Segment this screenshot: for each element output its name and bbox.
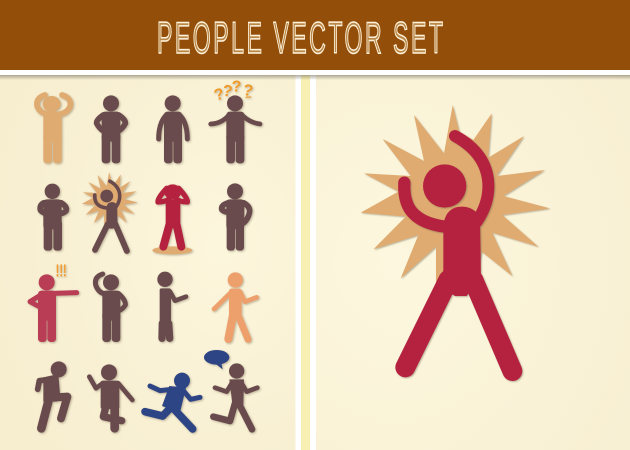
figure: arms at sides (159, 95, 187, 163)
divider: yellow stripe (301, 75, 310, 450)
figure: standing on one leg (89, 364, 132, 428)
figure: scratching head (95, 274, 125, 342)
figure: crimson arms raised (404, 136, 512, 371)
exclamation marks: !!! (56, 261, 67, 281)
icon grid, rows one and two, left columns (37, 95, 138, 251)
icon grid, rows one and two, right columns (152, 79, 260, 254)
figure: hands on head on tan shadow (152, 184, 192, 254)
question marks (212, 79, 254, 105)
question marks: ~ (244, 91, 253, 104)
question marks: ? (242, 82, 254, 100)
figure: climbing (38, 361, 67, 428)
panel: enlarged figure background (316, 75, 630, 450)
question marks: ? (221, 82, 233, 101)
icon grid, rows three and four, left columns (30, 261, 132, 428)
figure: small burst figure (82, 172, 138, 251)
figure: pointing (30, 274, 77, 342)
enlarged burst figure (361, 105, 550, 371)
figure: walking with speech (213, 363, 257, 429)
panel: icon grid background (0, 75, 296, 450)
title banner (0, 0, 630, 70)
question marks: ? (232, 79, 241, 96)
figure: confused shrug (211, 95, 260, 163)
icon grid, rows three and four, right columns (145, 272, 257, 429)
starburst (361, 105, 550, 290)
figure: orange walking (214, 272, 257, 339)
figure: side profile gesturing (157, 272, 186, 338)
figure: arms crossed (40, 184, 66, 251)
figure: blue runner (145, 373, 200, 429)
figure: hands on hips (97, 95, 125, 163)
question marks: ? (212, 86, 226, 105)
figure: arm across chest (222, 183, 250, 251)
title: PEOPLE VECTOR SET (157, 13, 443, 63)
figure: tan arms raised (37, 95, 70, 163)
speech bubble (204, 350, 229, 369)
